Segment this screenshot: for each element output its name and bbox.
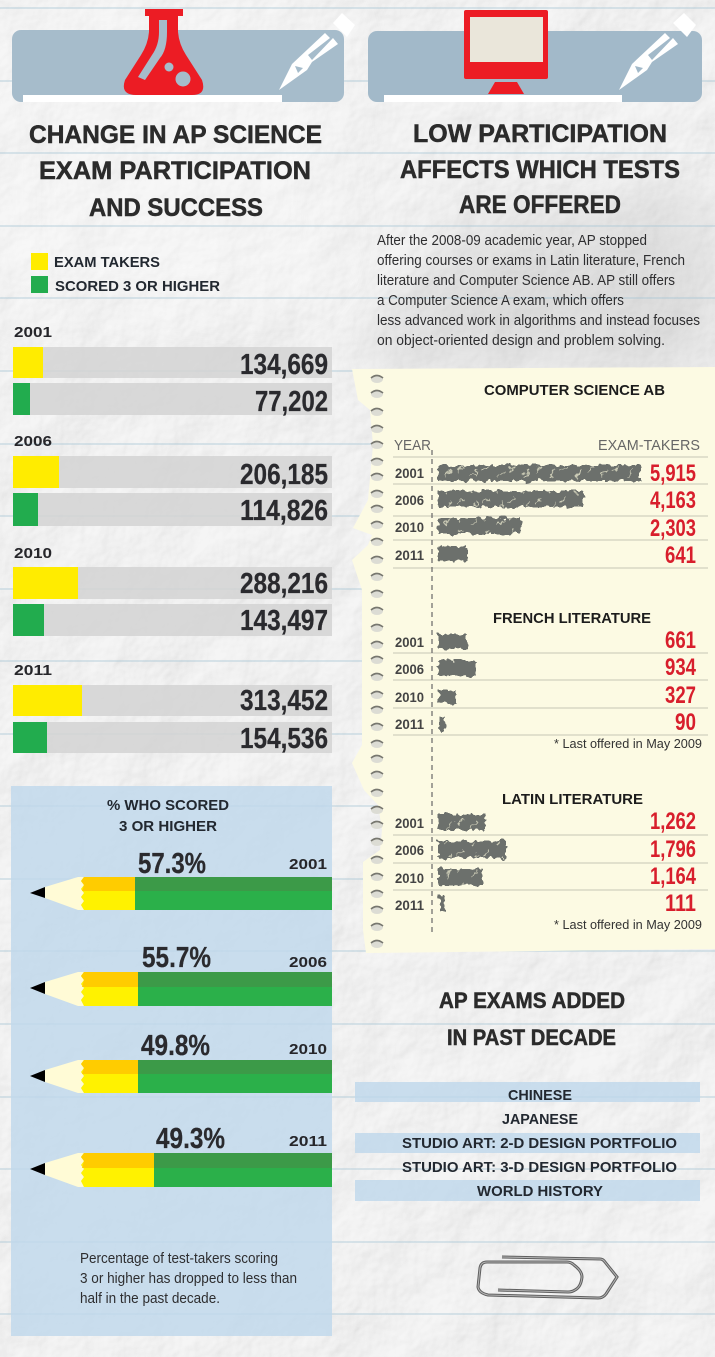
panel heading: 3 OR HIGHER (119, 818, 217, 835)
bar chart: exam takers by year: 143,497 (240, 605, 328, 637)
bar chart: exam takers by year: 2011 (14, 662, 52, 679)
table: French literature: 2010 (395, 689, 424, 705)
panel heading: % WHO SCORED (107, 797, 229, 814)
icon: paperclip (478, 1257, 617, 1298)
table: Latin literature: 2011 (395, 897, 424, 913)
table: Latin literature: 1,796 (650, 836, 696, 863)
bar chart: exam takers by year (13, 324, 332, 755)
pencil 2011: 2011 (289, 1133, 327, 1150)
legend: SCORED 3 OR HIGHER (55, 278, 220, 295)
panel note: 3 or higher has dropped to less than (80, 1270, 297, 1287)
table: French literature: * Last offered in May 2009 (554, 736, 702, 751)
table: computer science AB (394, 382, 700, 569)
bar chart: exam takers by year: 2001 (14, 324, 52, 341)
list of added exams: STUDIO ART: 3-D DESIGN PORTFOLIO (402, 1159, 677, 1176)
table: Latin literature: 1,164 (650, 863, 696, 890)
table: computer science AB: 4,163 (650, 487, 696, 514)
heading: low participation: ARE OFFERED (459, 191, 621, 219)
list of added exams: STUDIO ART: 2-D DESIGN PORTFOLIO (402, 1135, 677, 1152)
intro paragraph: a Computer Science A exam, which offers (377, 292, 624, 309)
heading: change in AP science: AND SUCCESS (89, 194, 263, 222)
intro paragraph: After the 2008-09 academic year, AP stopped (377, 232, 647, 249)
heading: low participation: AFFECTS WHICH TESTS (400, 156, 680, 184)
pencil 2010: 49.8% (141, 1030, 210, 1062)
bar chart: exam takers by year: 288,216 (240, 568, 328, 600)
panel: torn notepaper (352, 367, 715, 953)
panel heading (107, 797, 229, 835)
legend: EXAM TAKERS (54, 254, 160, 271)
table: French literature: 2011 (395, 716, 424, 732)
heading: AP exams added: IN PAST DECADE (447, 1025, 616, 1050)
bar chart: exam takers by year: 114,826 (240, 495, 328, 527)
header band: computing (368, 10, 702, 102)
table: French literature: 2001 (395, 634, 424, 650)
panel note (80, 1250, 297, 1307)
table: computer science AB: 641 (665, 542, 696, 569)
pencil 2011 (30, 1123, 332, 1187)
table: French literature: 90 (675, 709, 696, 736)
table: Latin literature: 111 (665, 890, 696, 917)
table: Latin literature: 2006 (395, 842, 424, 858)
table: computer science AB: 2011 (395, 547, 424, 563)
bar chart: exam takers by year: 2010 (14, 545, 52, 562)
pencil 2001: 57.3% (138, 848, 206, 880)
table: Latin literature: 1,262 (650, 808, 696, 835)
table: computer science AB: EXAM-TAKERS (598, 437, 700, 454)
pencil 2006: 55.7% (142, 942, 211, 974)
intro paragraph: literature and Computer Science AB. AP still offers (377, 272, 675, 289)
table: computer science AB: 2001 (395, 465, 424, 481)
intro paragraph: on object-oriented design and problem solving. (377, 332, 665, 349)
heading: change in AP science: CHANGE IN AP SCIENCE (29, 121, 322, 149)
list of added exams: WORLD HISTORY (477, 1183, 603, 1200)
bar chart: exam takers by year: 313,452 (240, 685, 328, 717)
heading: change in AP science: EXAM PARTICIPATION (39, 157, 311, 185)
pencil 2001: 2001 (289, 856, 327, 873)
heading: AP exams added: AP EXAMS ADDED (439, 988, 625, 1013)
bar chart: exam takers by year: 77,202 (255, 386, 328, 418)
table: French literature (395, 610, 702, 751)
table: computer science AB: COMPUTER SCIENCE AB (484, 382, 665, 399)
list of added exams (355, 1082, 700, 1201)
table: computer science AB: 2010 (395, 519, 424, 535)
table: computer science AB: YEAR (394, 437, 431, 454)
intro paragraph (377, 232, 700, 349)
spiral holes (371, 375, 383, 948)
table: computer science AB: 5,915 (650, 460, 696, 487)
icon: pencil (619, 13, 696, 90)
header band: science (12, 9, 355, 102)
table: French literature: 2006 (395, 661, 424, 677)
pencil 2001 (30, 848, 332, 910)
icon: flask (124, 9, 203, 95)
pencil 2006: 2006 (289, 954, 327, 971)
table: French literature: 934 (665, 654, 697, 681)
list of added exams: JAPANESE (502, 1111, 578, 1128)
table: Latin literature: 2010 (395, 870, 424, 886)
table: Latin literature (395, 791, 702, 932)
intro paragraph: offering courses or exams in Latin literature, French (377, 252, 685, 269)
table: Latin literature: * Last offered in May 2009 (554, 917, 702, 932)
icon: monitor (464, 10, 548, 94)
table: computer science AB: 2,303 (650, 515, 696, 542)
table: French literature: FRENCH LITERATURE (493, 610, 651, 627)
heading: AP exams added (439, 988, 625, 1050)
list of added exams: CHINESE (508, 1087, 572, 1104)
bar chart: exam takers by year: 206,185 (240, 459, 328, 491)
legend (31, 253, 220, 295)
bar chart: exam takers by year: 154,536 (240, 723, 328, 755)
table: Latin literature: 2001 (395, 815, 424, 831)
pencil 2010: 2010 (289, 1041, 327, 1058)
heading: low participation: LOW PARTICIPATION (413, 120, 667, 148)
pencil 2006 (30, 942, 332, 1006)
table: French literature: 327 (665, 682, 696, 709)
table: French literature: 661 (665, 627, 696, 654)
pencil 2010 (30, 1030, 332, 1093)
panel: percent who scored 3 or higher (11, 786, 332, 1336)
pencil 2011: 49.3% (156, 1123, 225, 1155)
bar chart: exam takers by year: 134,669 (240, 349, 328, 381)
icon: pencil (279, 13, 355, 90)
table: Latin literature: LATIN LITERATURE (502, 791, 643, 808)
heading: low participation (400, 120, 680, 219)
heading: change in AP science (29, 121, 322, 222)
table: computer science AB: 2006 (395, 492, 424, 508)
panel note: half in the past decade. (80, 1290, 220, 1307)
bar chart: exam takers by year: 2006 (14, 433, 52, 450)
panel note: Percentage of test-takers scoring (80, 1250, 278, 1267)
